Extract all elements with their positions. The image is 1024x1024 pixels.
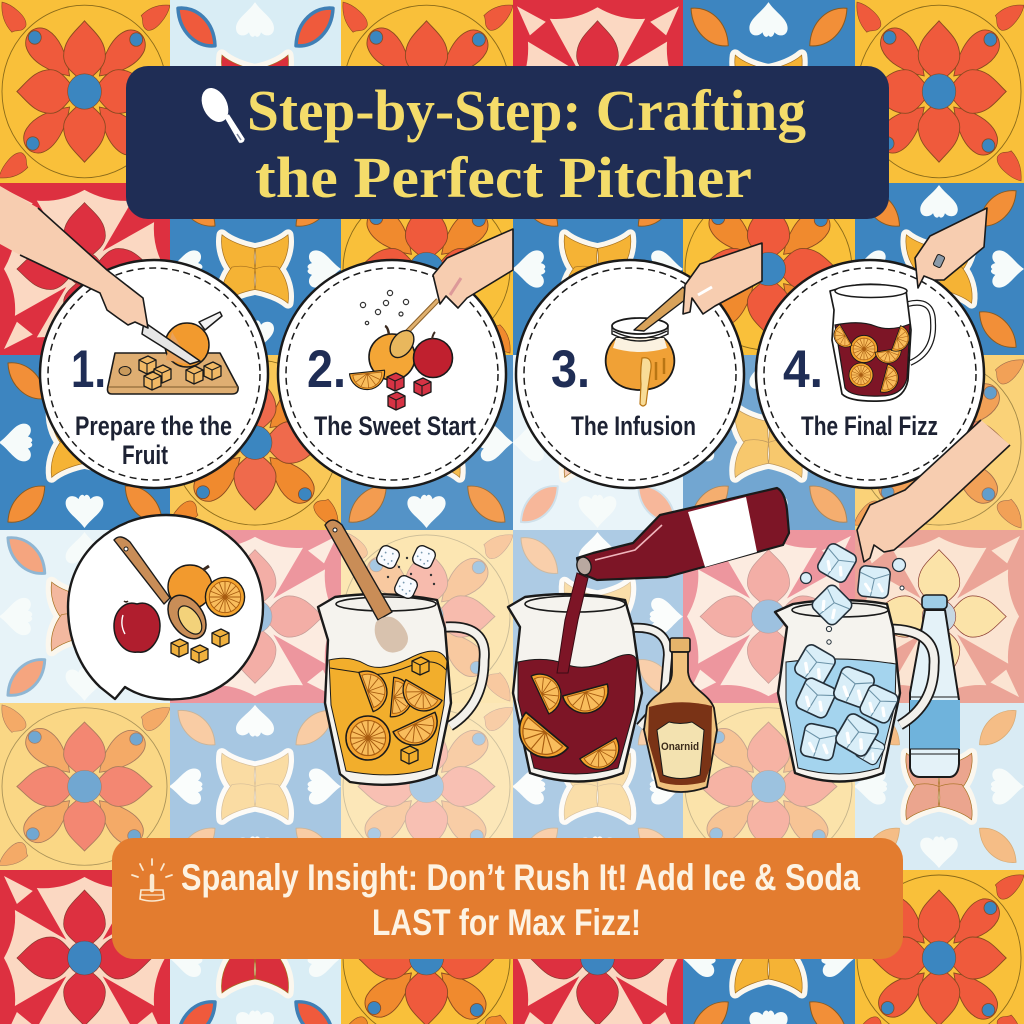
wine stream [557,573,588,673]
hand with spoon, step 2 [433,229,513,308]
step 2 number: 2. [307,340,346,399]
icon: fruit and sugar [349,290,452,410]
panel: title banner [126,66,889,219]
panel: step 2 circle [278,260,506,488]
icon: ice cubes falling [800,541,906,644]
hand, step 4 [915,208,987,288]
icon: stamp with rays [132,859,172,901]
icon: finished pitcher [829,284,933,401]
row 5 faded tiles [0,703,1024,870]
panel: step 3 circle [516,260,744,488]
icon: sugar cubes falling [375,544,437,600]
hand with stick, step 3 [683,243,762,314]
step 3 number: 3. [551,340,590,399]
soda bottle [910,595,960,777]
row 4 faded tiles [0,530,1024,703]
hand dropping ice [857,420,1010,562]
insight text: Spanaly Insight: Don’t Rush It! Add Ice & Soda [181,857,860,898]
wine bottle pouring [575,488,789,580]
row 3 tiles [0,355,1024,530]
title text: Step-by-Step: Crafting [247,78,806,143]
label: The Infusion: The Infusion [571,411,696,441]
icon: cutting board with fruit [108,312,238,394]
label: Prepare the Fruit: Fruit [122,440,168,470]
bottle label text: Onarnid [661,741,699,753]
icon: apple [114,601,160,652]
speech bubble: ingredients [68,515,263,699]
title text [247,78,806,210]
icon: spoon with sugar [325,520,408,653]
row 2 tiles [0,183,1024,355]
step 4 number: 4. [783,340,823,399]
row 1 tiles [0,0,1024,183]
label: Prepare the Fruit: Prepare the the [75,411,232,441]
pitcher 3: ice and soda [775,541,934,782]
hand and knife, step 1 [0,186,200,364]
label: Prepare the Fruit [75,411,232,470]
label: The Final Fizz: The Final Fizz [801,411,938,441]
pitcher 1: juice, fruit and sugar [318,520,484,785]
icon: orange and slice [160,565,245,646]
panel: step 4 circle [756,260,984,488]
step 1 number: 1. [71,340,106,399]
row 6 tiles [0,870,1024,1024]
icon: wooden spoon [114,537,170,604]
panel: step 1 circle [40,260,268,488]
title text: the Perfect Pitcher [255,145,752,210]
icon: spoon [196,84,245,143]
insight text: LAST for Max Fizz! [372,902,641,943]
label: The Sweet Start: The Sweet Start [314,411,476,441]
icon: sugar cubes [171,629,229,663]
insight text [181,857,860,943]
liqueur bottle [644,638,717,792]
panel: insight banner [112,838,903,959]
pitcher 2: wine and fruit [508,573,668,782]
icon: honey jar [606,287,690,406]
